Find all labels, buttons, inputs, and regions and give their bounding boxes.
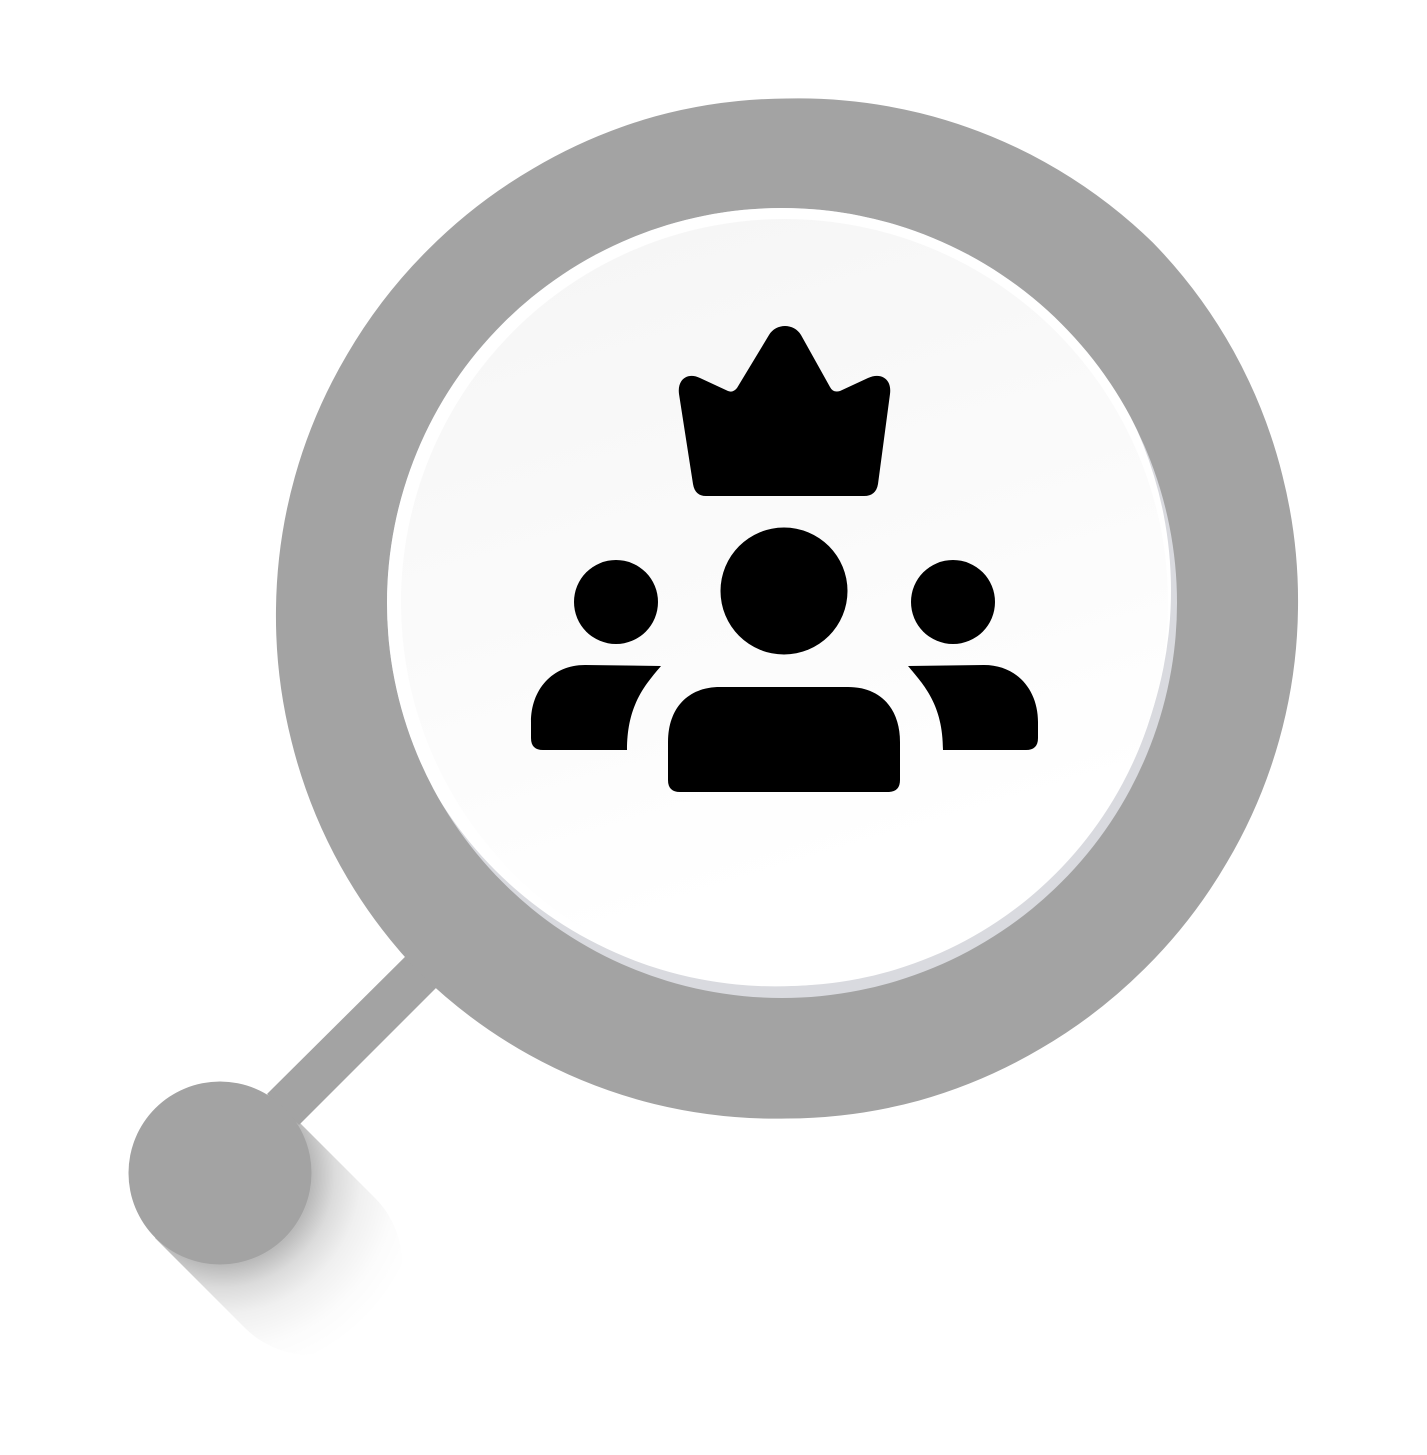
magnifier ring [276, 98, 1298, 1119]
long shadow of knob [155, 1108, 402, 1355]
icon: center person body [668, 687, 900, 792]
magnifier handle [267, 938, 456, 1125]
icon: right person head [911, 560, 995, 644]
lens rim shadow crescent and highlight [380, 195, 1177, 998]
icon: left person body [531, 665, 661, 750]
icon: left person head [574, 560, 658, 644]
icon: crown [679, 326, 890, 496]
icon: center person head [720, 528, 848, 654]
lens face [401, 219, 1168, 986]
magnifier infographic [128, 98, 1298, 1332]
icon: team with crown [531, 326, 1038, 792]
handle knob [128, 1082, 312, 1264]
icon: right person body [908, 665, 1038, 750]
